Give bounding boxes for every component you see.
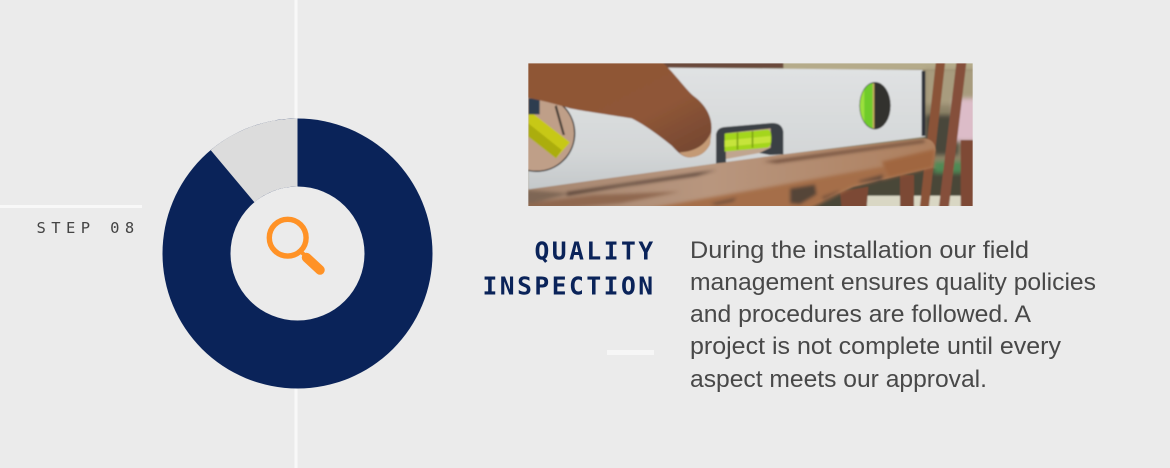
body text: project is not complete until every (690, 333, 1061, 360)
photo backdrop (528, 63, 973, 206)
donut segment: remaining grey (211, 118, 298, 202)
level: right hole with green vial (859, 82, 891, 129)
body text: and procedures are followed. A (690, 301, 1031, 328)
heading rule (607, 350, 654, 355)
step rule (0, 205, 142, 208)
step label: STEP 08 (36, 219, 140, 237)
body text: aspect meets our approval. (690, 366, 987, 393)
level body (497, 68, 925, 189)
body text: management ensures quality policies (690, 269, 1096, 296)
level: centre vial window (716, 123, 783, 163)
body text (690, 237, 1096, 393)
photo: spirit level on wooden board (528, 63, 973, 206)
donut chart (162, 118, 432, 388)
heading: QUALITY (534, 236, 656, 265)
wooden board (525, 138, 936, 212)
donut segment: navy progress (162, 118, 432, 388)
heading (482, 236, 656, 300)
hand / finger (527, 62, 712, 157)
vertical divider line (294, 0, 298, 468)
icon: magnifying glass (269, 219, 320, 270)
body text: During the installation our field (690, 237, 1029, 264)
donut centre (230, 186, 364, 320)
heading: INSPECTION (482, 271, 656, 300)
level: left hole with yellow vial (528, 98, 575, 172)
